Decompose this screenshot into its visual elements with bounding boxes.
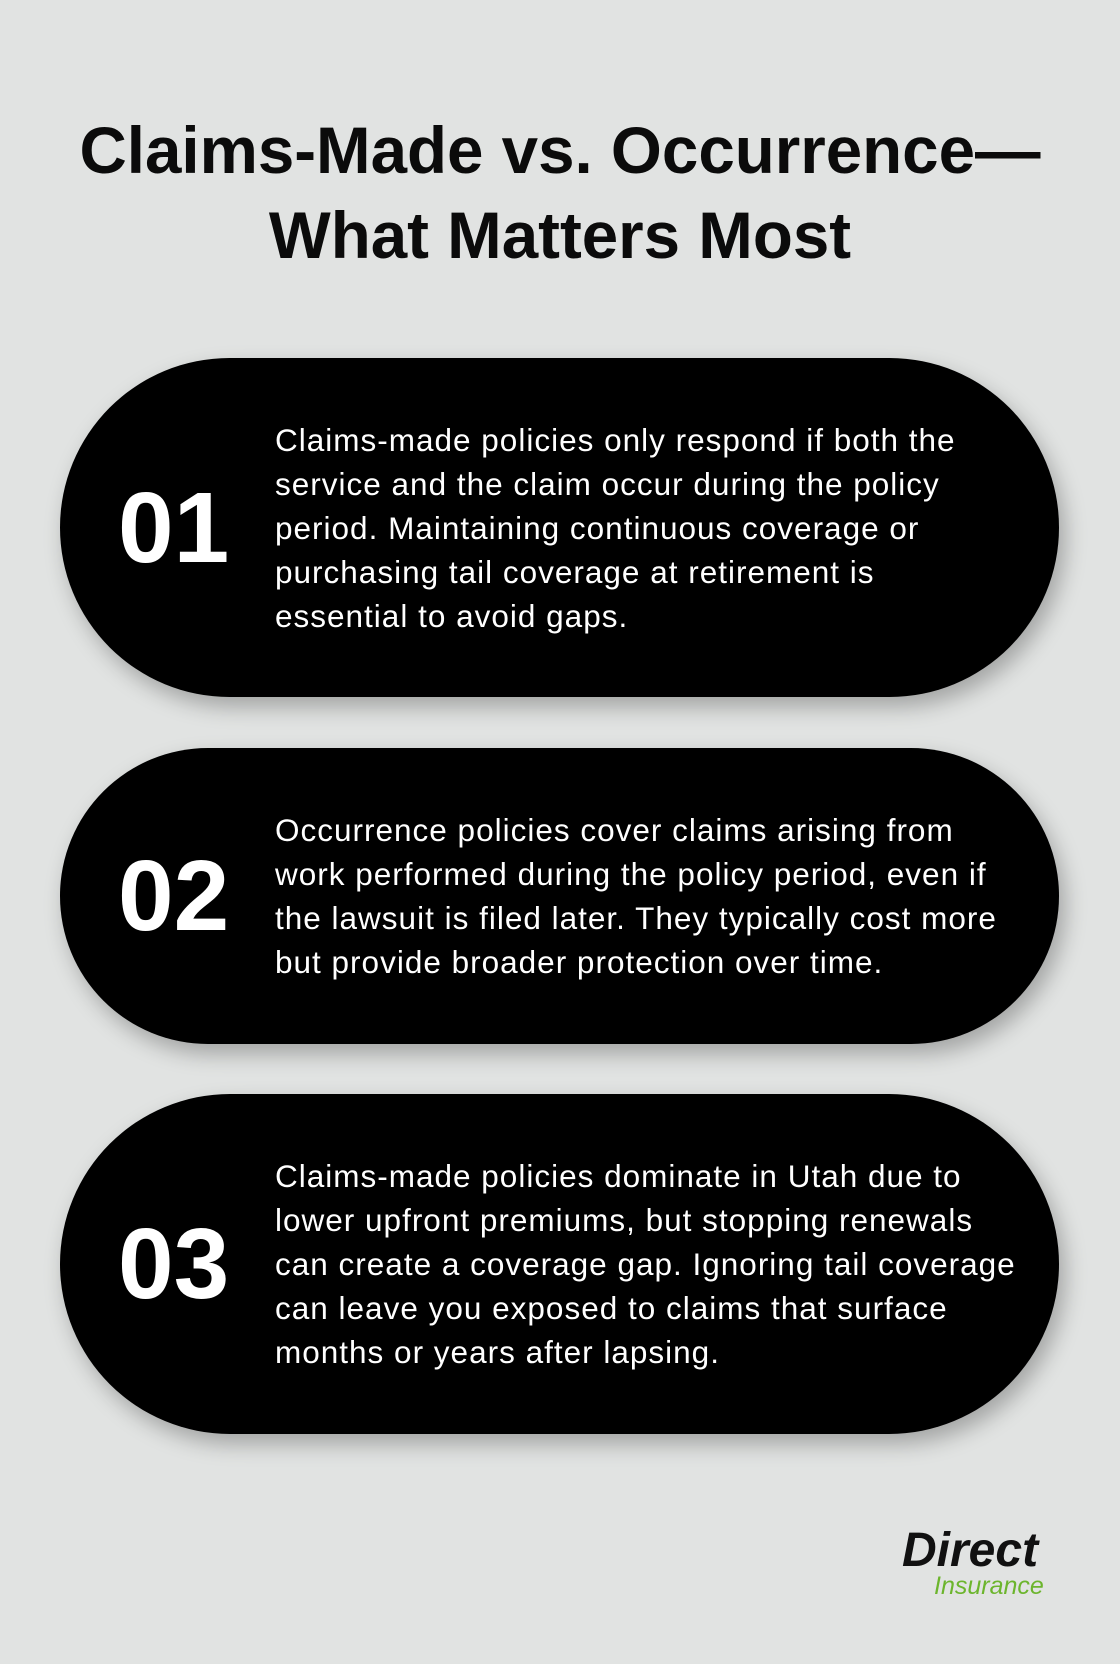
text 01: essential to avoid gaps. [275, 598, 628, 634]
text 02: but provide broader protection over time. [275, 944, 883, 980]
panel: 02 [60, 748, 1059, 1044]
text 02: work performed during the policy period, even if [275, 856, 987, 892]
text 01: service and the claim occur during the policy [275, 466, 940, 502]
number 03: 03 [118, 1208, 229, 1320]
text 01: period. Maintaining continuous coverage or [275, 510, 919, 546]
text 03: can create a coverage gap. Ignoring tail coverage [275, 1246, 1016, 1282]
text 02: the lawsuit is filed later. They typically cost more [275, 900, 997, 936]
title [79, 114, 1041, 272]
text 01: Claims-made policies only respond if both the [275, 422, 956, 458]
text 03: Claims-made policies dominate in Utah due to [275, 1158, 962, 1194]
panel: 01 [60, 358, 1059, 697]
panel: 03 [60, 1094, 1059, 1434]
text 03: lower upfront premiums, but stopping renewals [275, 1202, 973, 1238]
logo [902, 1524, 1044, 1600]
text 01: purchasing tail coverage at retirement is [275, 554, 875, 590]
logo: Direct [902, 1524, 1038, 1577]
text 03 [275, 1158, 1016, 1370]
number 01: 01 [118, 472, 229, 584]
text 02 [275, 812, 997, 980]
text 03: months or years after lapsing. [275, 1334, 720, 1370]
text 03: can leave you exposed to claims that surface [275, 1290, 948, 1326]
logo: Insurance [934, 1572, 1044, 1600]
title: What Matters Most [269, 199, 851, 272]
text 01 [275, 422, 956, 634]
title: Claims-Made vs. Occurrence— [79, 114, 1041, 187]
text 02: Occurrence policies cover claims arising from [275, 812, 954, 848]
number 02: 02 [118, 840, 229, 952]
